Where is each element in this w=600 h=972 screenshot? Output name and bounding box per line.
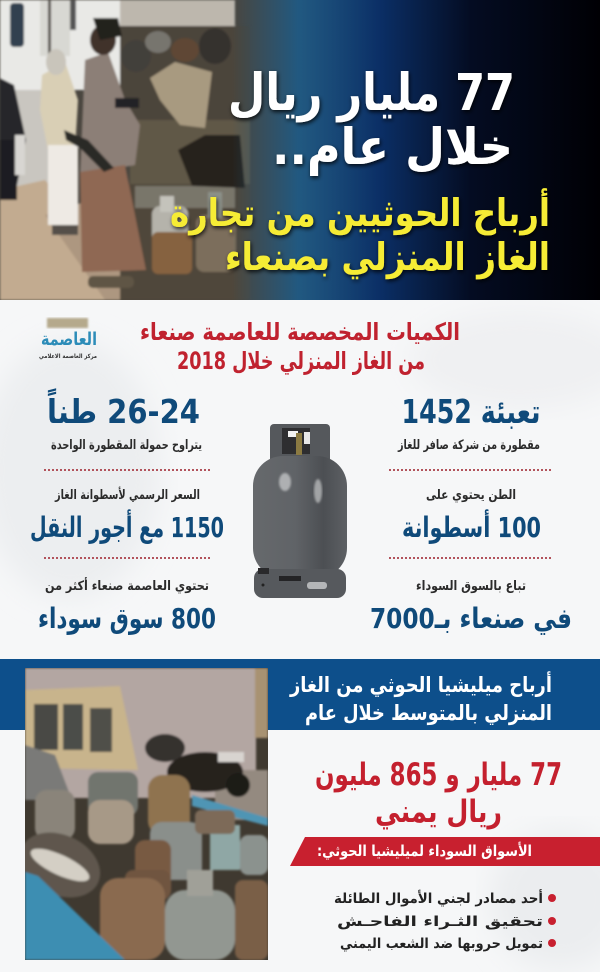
gradient overlay [232, 0, 600, 300]
banner: black markets [290, 837, 600, 866]
stat: 100 cylinders: الطن يحتوي على [426, 488, 516, 503]
subtitle line 2: الغاز المنزلي بصنعاء [225, 235, 550, 279]
section heading: allocated quantities [140, 318, 460, 375]
stat: 800 black markets [38, 577, 216, 635]
photo: pickup truck loaded with gas cylinders [9, 668, 268, 960]
stat: sold for 7000 in Sanaa [370, 579, 572, 635]
bullet 2: تحقيق الثـراء الفاحـش [337, 914, 543, 930]
stat: 800 black markets: تحتوي العاصمة صنعاء أكثر من [45, 577, 209, 594]
logo: Al-Asima media center: العاصمة [41, 329, 97, 350]
stat: 100 cylinders: 100 أسطوانة [402, 509, 541, 544]
stat: official price 1150: 1150 مع أجور النقل [30, 509, 224, 544]
section heading: allocated quantities: الكميات المخصصة للعاصمة صنعاء [140, 318, 460, 346]
big figure: 77 billion 865 million [315, 757, 562, 830]
stat: 24-26 tons: يتراوح حمولة المقطورة الواحدة [51, 438, 202, 453]
dotted dividers row 2 [44, 557, 553, 559]
stat: 1452 tankers [397, 392, 540, 453]
dotted dividers row 1 [44, 469, 553, 471]
panel: blue profits band [0, 659, 600, 730]
panel: blue profits band: أرباح ميليشيا الحوثي من الغاز [289, 670, 552, 697]
stat: 1452 tankers: مقطورة من شركة صافر للغاز [397, 438, 540, 453]
subtitle: yellow headline [170, 188, 550, 279]
section heading: allocated quantities: من الغاز المنزلي خلال 2018 [177, 347, 425, 375]
panel: blue profits band: المنزلي بالمتوسط خلال عام [305, 701, 552, 725]
header panel with photo and gradient [0, 0, 600, 300]
stat: official price 1150: السعر الرسمي لأسطوانة الغاز [54, 486, 200, 503]
big figure: 77 billion 865 million: 77 مليار و 865 مليون [315, 757, 562, 793]
stat: 24-26 tons [47, 388, 202, 453]
banner: black markets: الأسواق السوداء لميليشيا الحوثي: [317, 842, 532, 860]
stat: official price 1150 [30, 486, 224, 544]
big figure: 77 billion 865 million: ريال يمني [375, 794, 502, 830]
stat: 100 cylinders [402, 488, 541, 544]
logo: Al-Asima media center: مركز العاصمة الاعلامي [39, 353, 97, 360]
stat: 1452 tankers: تعبئة 1452 [401, 392, 540, 431]
stat: sold for 7000 in Sanaa: تباع بالسوق السوداء [416, 579, 526, 594]
bullet 1: أحد مصادر لجني الأموال الطائلة [334, 889, 543, 907]
headline line 2: خلال عام.. [272, 118, 513, 176]
icon: gas cylinder [253, 424, 347, 598]
headline line 1: 77 مليار ريال [228, 64, 515, 123]
stat: 24-26 tons: 26-24 طناً [47, 388, 200, 431]
bullet 3: تمويل حروبها ضد الشعب اليمني [340, 936, 543, 952]
stat: sold for 7000 in Sanaa: في صنعاء بـ7000 [370, 602, 572, 635]
logo: Al-Asima media center [39, 318, 97, 360]
bullet list [334, 889, 556, 952]
photo: gas trucks and men in the street [0, 0, 355, 300]
stat: 800 black markets: 800 سوق سوداء [38, 602, 216, 635]
title: white headline [228, 64, 515, 176]
